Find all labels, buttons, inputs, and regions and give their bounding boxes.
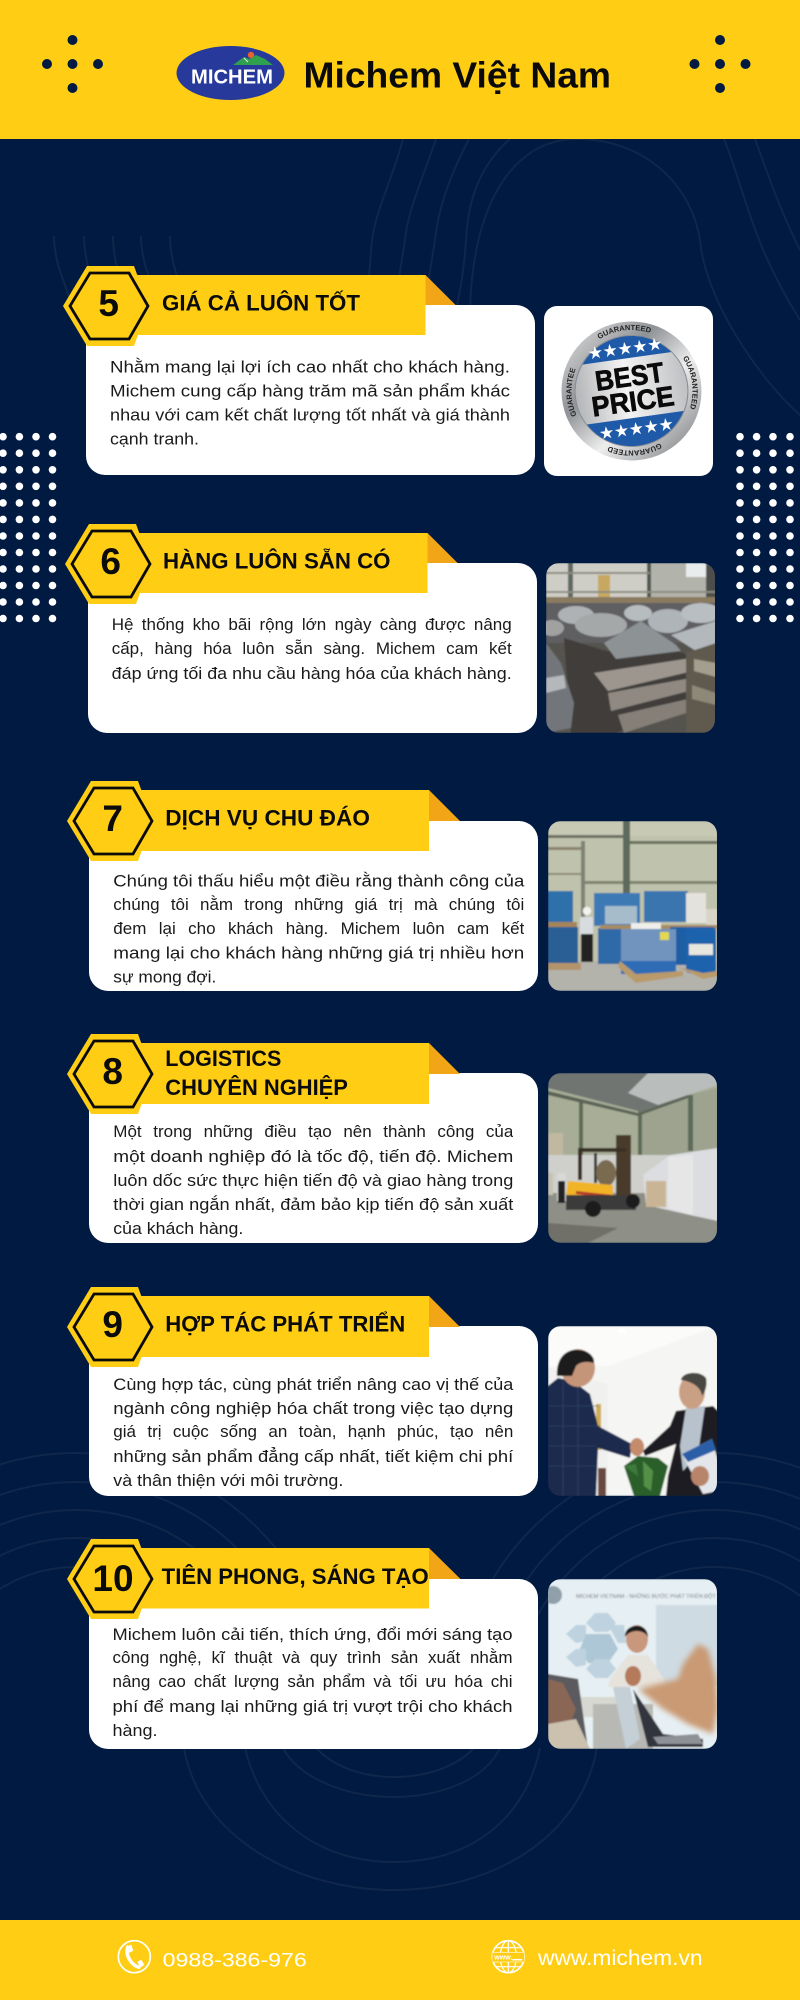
number badge bbox=[67, 1034, 152, 1114]
number badge bbox=[67, 781, 152, 861]
panel: item 10 bbox=[67, 1539, 729, 1749]
body text bbox=[113, 1120, 514, 1238]
body text: Nhằm mang lại lợi ích cao nhất cho khách hàng. bbox=[110, 358, 510, 377]
side dots right bbox=[736, 433, 794, 622]
banner fold bbox=[428, 533, 458, 563]
heading: CHUYÊN NGHIỆP bbox=[165, 1075, 348, 1100]
number badge bbox=[67, 1539, 152, 1619]
body text bbox=[110, 358, 511, 449]
text card bbox=[88, 563, 537, 733]
footer band bbox=[0, 1920, 800, 2000]
icon: globe: www. bbox=[493, 1955, 512, 1962]
photo: best price badge: BEST bbox=[593, 356, 666, 397]
panel: item 7 bbox=[67, 781, 720, 991]
photo: best price badge: GUARANTEED bbox=[608, 444, 662, 456]
header dots right bbox=[690, 35, 750, 93]
photo: best price badge: PRICE bbox=[590, 380, 676, 423]
heading bbox=[165, 1046, 348, 1100]
website: www.michem.vn bbox=[537, 1947, 702, 1970]
title: Michem Việt Nam bbox=[304, 54, 611, 96]
body text: nhau với cam kết chất lượng tốt nhất và giá thành bbox=[110, 406, 510, 425]
body text: đáp ứng tối đa nhu cầu hàng hóa của khách hàng. bbox=[112, 664, 512, 683]
body text: đem lại cho khách hàng. Michem luôn cam kết bbox=[113, 919, 524, 938]
body text bbox=[113, 1375, 514, 1490]
heading: TIÊN PHONG, SÁNG TẠO bbox=[162, 1564, 429, 1589]
photo: forklift warehouse bbox=[548, 1073, 718, 1243]
photo: blue drums warehouse bbox=[548, 821, 720, 991]
text card bbox=[86, 305, 535, 475]
body text: mang lại cho khách hàng những giá trị nhiều hơn bbox=[113, 944, 524, 963]
body text: hàng. bbox=[112, 1721, 158, 1740]
icon: globe bbox=[492, 1941, 524, 1973]
body text: thời gian ngắn nhất, đảm bảo kịp tiến độ sản xuất bbox=[113, 1195, 514, 1214]
side dots left bbox=[0, 433, 56, 622]
body text: ngành công nghiệp hóa chất trong việc tạo dựng bbox=[113, 1399, 513, 1418]
number badge: 9 bbox=[102, 1304, 123, 1345]
logo: Michem: MICHEM bbox=[191, 66, 273, 88]
heading: DỊCH VỤ CHU ĐÁO bbox=[165, 806, 370, 831]
banner bbox=[87, 275, 426, 335]
banner fold bbox=[429, 790, 460, 821]
photo: warehouse pallets bbox=[540, 563, 721, 733]
banner fold bbox=[429, 1548, 460, 1579]
banner fold bbox=[429, 1296, 460, 1327]
number badge bbox=[63, 266, 148, 346]
body text bbox=[112, 613, 512, 683]
body text: Hệ thống kho bãi rộng lớn ngày càng được nâng bbox=[112, 615, 512, 634]
photo: best price badge: GUARANTEED bbox=[598, 324, 651, 338]
panel: item 8 bbox=[67, 1034, 718, 1243]
banner bbox=[91, 1296, 429, 1357]
number badge: 6 bbox=[100, 541, 121, 582]
photo: presentation bbox=[544, 1579, 729, 1749]
number badge: 5 bbox=[98, 283, 119, 324]
number badge: 7 bbox=[102, 798, 123, 839]
banner bbox=[91, 1548, 429, 1608]
photo: handshake bbox=[548, 1326, 718, 1496]
logo: Michem bbox=[176, 46, 284, 100]
number badge bbox=[67, 1287, 152, 1367]
phone number: 0988-386-976 bbox=[163, 1950, 307, 1972]
body text: giá trị cuộc sống an toàn, hạnh phúc, tạo nên bbox=[113, 1422, 513, 1441]
panel: item 5 bbox=[63, 266, 713, 476]
body text: Michem luôn cải tiến, thích ứng, đổi mới sáng tạo bbox=[112, 1625, 512, 1644]
body text: Một trong những điều tạo nên thành công của bbox=[113, 1122, 513, 1141]
body text: luôn dốc sức thực hiện tiến độ và giao hàng trong bbox=[113, 1171, 513, 1190]
body text: Michem cung cấp hàng trăm mã sản phẩm khác bbox=[110, 382, 511, 401]
photo: best price badge bbox=[544, 306, 713, 476]
body text: và thân thiện với môi trường. bbox=[113, 1471, 343, 1490]
number badge: 8 bbox=[102, 1051, 123, 1092]
body text: công nghệ, kĩ thuật và quy trình sản xuất nhằm bbox=[112, 1648, 512, 1667]
panel: item 6 bbox=[65, 524, 721, 733]
body text: của khách hàng. bbox=[113, 1219, 243, 1238]
panel: item 9 bbox=[67, 1287, 718, 1496]
photo: best price badge: GUARANTEED bbox=[684, 356, 698, 410]
heading: LOGISTICS bbox=[165, 1046, 281, 1071]
body text: Chúng tôi thấu hiểu một điều rằng thành công của bbox=[113, 872, 525, 891]
banner bbox=[91, 790, 429, 851]
heading: HỢP TÁC PHÁT TRIỂN bbox=[165, 1312, 405, 1337]
body text: sự mong đợi. bbox=[113, 968, 216, 987]
body text: những sản phẩm đẳng cấp nhất, tiết kiệm chi phí bbox=[113, 1447, 514, 1466]
heading: GIÁ CẢ LUÔN TỐT bbox=[162, 290, 361, 316]
photo: best price badge: ★★★★★ bbox=[599, 415, 675, 442]
body text bbox=[113, 872, 525, 987]
body text: Cùng hợp tác, cùng phát triển nâng cao vị thế của bbox=[113, 1375, 514, 1394]
body text: cạnh tranh. bbox=[110, 430, 199, 449]
banner bbox=[91, 1043, 429, 1104]
photo: best price badge: GUARANTEED bbox=[566, 368, 576, 416]
photo: best price badge: ★★★★★ bbox=[587, 335, 664, 362]
icon: phone bbox=[118, 1941, 150, 1973]
header band bbox=[0, 0, 800, 139]
header dots left bbox=[42, 35, 103, 93]
banner fold bbox=[426, 275, 456, 305]
text card bbox=[89, 1073, 538, 1243]
body text: chúng tôi nằm trong những giá trị mà chúng tôi bbox=[113, 895, 524, 914]
text card bbox=[89, 821, 538, 991]
body text: một doanh nghiệp đó là tốc độ, tiến độ. Michem bbox=[113, 1147, 513, 1166]
banner fold bbox=[429, 1043, 460, 1074]
heading: HÀNG LUÔN SẴN CÓ bbox=[163, 548, 390, 574]
number badge: 10 bbox=[92, 1558, 134, 1599]
number badge bbox=[65, 524, 150, 604]
banner bbox=[89, 533, 428, 593]
body text: phí để mang lại những giá trị vượt trội cho khách bbox=[112, 1697, 512, 1716]
body text: nâng cao chất lượng sản phẩm và tối ưu hóa chi bbox=[112, 1672, 512, 1691]
body text: cấp, hàng hóa luôn sẵn sàng. Michem cam kết bbox=[112, 639, 512, 658]
body text bbox=[112, 1625, 512, 1740]
text card bbox=[89, 1326, 538, 1496]
photo: presentation: MICHEM VIETNAM - NHỮNG BƯỚC PHÁT TRIỂN ĐỘT PHÁ bbox=[576, 1593, 729, 1600]
text card bbox=[89, 1579, 538, 1749]
